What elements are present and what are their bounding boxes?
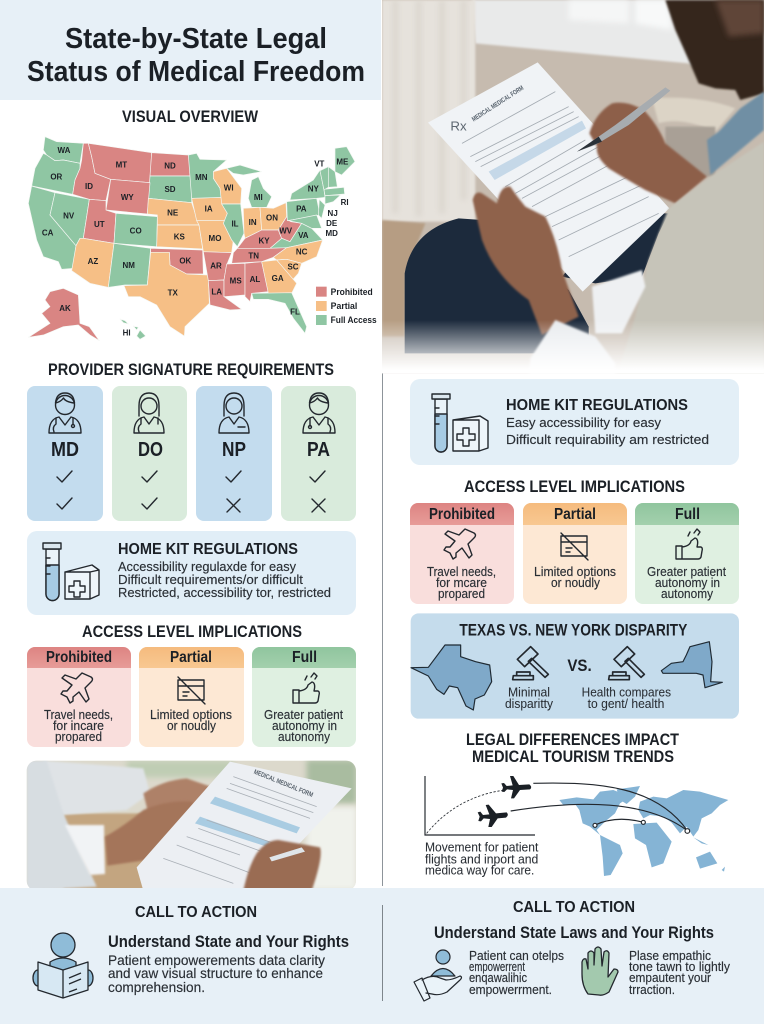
trousers <box>405 218 589 353</box>
icon: New York shape <box>661 642 722 688</box>
US map: NY <box>308 185 320 194</box>
right hand <box>589 103 707 203</box>
US map: OR <box>50 173 63 182</box>
heading: legal differences impact <box>466 730 680 766</box>
card: partial: Limited options <box>150 707 232 722</box>
title: State-by-State Legal <box>65 23 327 55</box>
card: partial: Partial <box>170 649 212 666</box>
call to action band <box>0 888 764 1024</box>
icon: test tube and kit <box>43 543 99 601</box>
panel: call to action left: CALL TO ACTION <box>135 904 257 921</box>
panel: call to action right <box>414 899 730 1001</box>
US map: WI <box>224 184 234 193</box>
card: prohibited: propared <box>55 729 102 744</box>
map legend: Full Access <box>331 315 377 325</box>
form <box>428 62 669 292</box>
axes <box>425 776 535 835</box>
icon: raised hand <box>582 947 618 995</box>
curtain <box>382 0 475 222</box>
panel: home kit regulations (right) <box>410 379 739 465</box>
panel: home kit regulations (left): Difficult requirements/or difficult <box>118 572 303 587</box>
icon: person in hand <box>414 950 462 1001</box>
card: full <box>252 647 356 747</box>
US map: SD <box>164 185 176 194</box>
panel: home kit regulations (right): Easy accessibility for easy <box>506 415 661 430</box>
US map: ID <box>85 182 93 191</box>
US map: LA <box>211 287 222 296</box>
panel: home kit regulations (left): Accessibility regulaxde for easy <box>118 559 296 574</box>
chart: tourism trend and world map: flights and inport and <box>425 852 538 866</box>
US map: VT <box>314 159 325 168</box>
column divider line <box>382 20 383 886</box>
US map: VA <box>298 231 309 240</box>
card: prohibited: Travel needs, <box>427 564 496 579</box>
US map: NV <box>63 212 75 221</box>
coat <box>633 144 763 330</box>
icon: test tube and kit <box>432 394 488 452</box>
US map: MN <box>195 173 208 182</box>
head <box>665 0 764 100</box>
panel: home kit regulations (left): HOME KIT REGULATIONS <box>118 541 298 558</box>
card: prohibited: for incare <box>53 718 104 733</box>
card: partial: Limited options <box>534 564 616 579</box>
map legend <box>316 287 377 325</box>
icon: gavel left <box>513 647 548 680</box>
US map: WV <box>279 227 293 236</box>
heading: access level implications (left): ACCESS LEVEL IMPLICATIONS <box>82 622 302 641</box>
US map: NC <box>296 247 308 256</box>
US map: RI <box>341 198 349 207</box>
US map: KS <box>174 233 186 242</box>
icon: nurse <box>219 393 249 433</box>
US map: NJ <box>328 209 338 218</box>
photo: doctor filling in medical form (right) <box>382 0 764 380</box>
panel: Texas vs New York disparity: Minimal <box>508 686 550 700</box>
US map: ON <box>266 214 278 223</box>
card: full: autonomy <box>661 586 713 601</box>
header band <box>0 0 381 100</box>
dashed trend line <box>427 790 505 833</box>
icon: plane <box>61 673 92 703</box>
US map: MD <box>325 229 338 238</box>
US map: ND <box>164 161 176 170</box>
panel: home kit regulations (left) <box>27 531 356 615</box>
card: full: autonomy in <box>655 575 720 590</box>
US map: MT <box>116 160 127 169</box>
world map <box>559 786 728 876</box>
panel: call to action right: Plase empathic <box>629 948 711 963</box>
icon: plane <box>444 529 476 559</box>
US map: DE <box>326 219 338 228</box>
icon: plane upper <box>501 776 531 798</box>
card: full: autonomy in <box>272 718 337 733</box>
panel: home kit regulations (left): Restricted, accessibility tor, restricted <box>118 585 331 600</box>
icon: thumbs up <box>293 673 319 703</box>
US map: OK <box>179 256 192 265</box>
card: full: Full <box>292 649 317 666</box>
card: full: Greater patient <box>264 707 343 722</box>
chart: tourism trend and world map: Movement for patient <box>425 841 539 855</box>
US map: AZ <box>88 257 98 266</box>
title <box>27 23 365 88</box>
chart: tourism trend and world map <box>425 776 728 877</box>
card: prohibited <box>27 647 131 747</box>
card: prohibited: Travel needs, <box>44 707 113 722</box>
panel: Texas vs New York disparity: to gent/ health <box>588 697 664 711</box>
map legend: Partial <box>331 301 357 311</box>
card: partial: or noudly <box>167 718 216 733</box>
access cards (left) <box>27 647 356 747</box>
heading: legal differences impact: LEGAL DIFFERENCES IMPACT <box>466 730 680 749</box>
card: partial: or noudly <box>551 575 600 590</box>
panel: call to action right: Patient can otelps <box>469 948 564 963</box>
panel: call to action right: enqawalihic <box>469 970 527 985</box>
icon: physician assistant <box>303 393 335 433</box>
panel: call to action left: and vaw visual structure to enhance <box>108 965 323 981</box>
panel: call to action right: trraction. <box>629 982 675 997</box>
card: PA <box>281 386 356 521</box>
icon: thumbs up <box>676 529 702 559</box>
panel: call to action left: Patient empowerements data clarity <box>108 952 325 968</box>
panel: home kit regulations (right): HOME KIT REGULATIONS <box>506 397 688 414</box>
icon: gavel right <box>609 647 644 680</box>
heading: provider signature requirements: PROVIDER SIGNATURE REQUIREMENTS <box>48 360 334 379</box>
card: DO: DO <box>138 439 163 461</box>
US map: MO <box>209 234 221 243</box>
panel: call to action left <box>33 904 349 998</box>
US map: UT <box>94 220 105 229</box>
card: full: Full <box>675 506 700 523</box>
photo: hands holding medical form (left) <box>27 760 357 891</box>
card: PA: PA <box>307 439 330 461</box>
collar <box>707 92 764 175</box>
US map: NM <box>122 261 135 270</box>
heading: visual overview: VISUAL OVERVIEW <box>122 107 259 126</box>
US map: CO <box>130 226 142 235</box>
card: MD: MD <box>51 439 79 461</box>
US map: TN <box>248 251 259 260</box>
card: prohibited: for mcare <box>436 575 487 590</box>
US map: HI <box>123 329 131 338</box>
card: full <box>635 503 739 604</box>
panel: Texas vs New York disparity: disparitty <box>505 697 554 711</box>
panel: call to action left: Understand State and Your Rights <box>108 932 349 951</box>
panel: call to action right: tone tawn to lightly <box>629 959 730 974</box>
panel: Texas vs New York disparity <box>411 613 739 719</box>
US map: MS <box>230 276 242 285</box>
photo: doctor filling in medical form (right): Rx <box>450 119 467 134</box>
icon: female doctor <box>134 393 164 433</box>
chart: tourism trend and world map: medica way for care. <box>425 863 534 877</box>
sofa <box>652 98 735 132</box>
heading: legal differences impact: MEDICAL TOURISM TRENDS <box>472 747 674 766</box>
panel: call to action right: empowerrent <box>469 959 525 974</box>
photo: hands holding medical form (left): MEDICAL MEDICAL FORM <box>253 769 314 799</box>
panel: call to action right: CALL TO ACTION <box>513 899 635 916</box>
US map: AR <box>210 261 222 270</box>
panel: Texas vs New York disparity: Health compares <box>582 686 671 700</box>
US map: FL <box>290 307 300 316</box>
US map: IL <box>231 219 239 228</box>
US map <box>28 137 355 341</box>
bottom hand <box>473 187 579 335</box>
US map: AK <box>59 304 71 313</box>
card: partial <box>139 647 244 747</box>
flight paths <box>511 783 687 831</box>
icon: male doctor <box>49 393 81 433</box>
pen <box>577 87 670 152</box>
card: NP: NP <box>222 439 246 461</box>
panel: Texas vs New York disparity: VS. <box>567 656 592 675</box>
panel: home kit regulations (right): Difficult requirability am restricted <box>506 432 709 447</box>
panel: call to action right: Understand State Laws and Your Rights <box>434 923 714 942</box>
US map: IA <box>205 205 213 214</box>
US map: CA <box>42 229 54 238</box>
card: partial: Partial <box>554 506 596 523</box>
card: MD <box>27 386 103 521</box>
card: prohibited: Prohibited <box>429 506 495 523</box>
US map: PA <box>296 204 307 213</box>
card: prohibited <box>410 503 514 604</box>
heading: access level implications (right): ACCESS LEVEL IMPLICATIONS <box>464 477 685 496</box>
card: partial <box>523 503 627 604</box>
US map: GA <box>272 274 284 283</box>
panel: Texas vs New York disparity: TEXAS VS. NEW YORK DISPARITY <box>459 622 687 640</box>
photo: doctor filling in medical form (right): MEDICAL MEDICAL FORM <box>471 85 525 123</box>
US map: NE <box>167 209 179 218</box>
icon: crossed card <box>178 677 205 704</box>
US map: WY <box>121 193 134 202</box>
icon: person reading <box>33 933 93 998</box>
card: prohibited: propared <box>438 586 485 601</box>
icon: Texas shape <box>411 645 492 710</box>
card: DO <box>112 386 187 521</box>
US map: ME <box>336 158 349 167</box>
icon: plane lower <box>478 805 508 827</box>
icon: crossed card <box>561 533 588 560</box>
US map: WA <box>58 146 71 155</box>
window <box>472 0 764 87</box>
US map: KY <box>258 237 270 246</box>
card: full: Greater patient <box>647 564 726 579</box>
US map: IN <box>249 218 257 227</box>
US map: SC <box>287 263 299 272</box>
US map: TX <box>168 289 178 298</box>
title: Status of Medical Freedom <box>27 56 365 88</box>
map legend: Prohibited <box>331 287 373 297</box>
band divider line <box>382 905 383 1001</box>
card: NP <box>196 386 272 521</box>
card: full: autonomy <box>278 729 330 744</box>
panel: call to action right: empowerrment. <box>469 982 552 997</box>
card: prohibited: Prohibited <box>46 649 112 666</box>
panel: call to action right: empautent your <box>629 970 712 985</box>
panel: call to action left: comprehension. <box>108 979 205 995</box>
US map: AL <box>250 275 260 284</box>
access cards (right) <box>410 503 739 604</box>
US map: MI <box>254 193 263 202</box>
